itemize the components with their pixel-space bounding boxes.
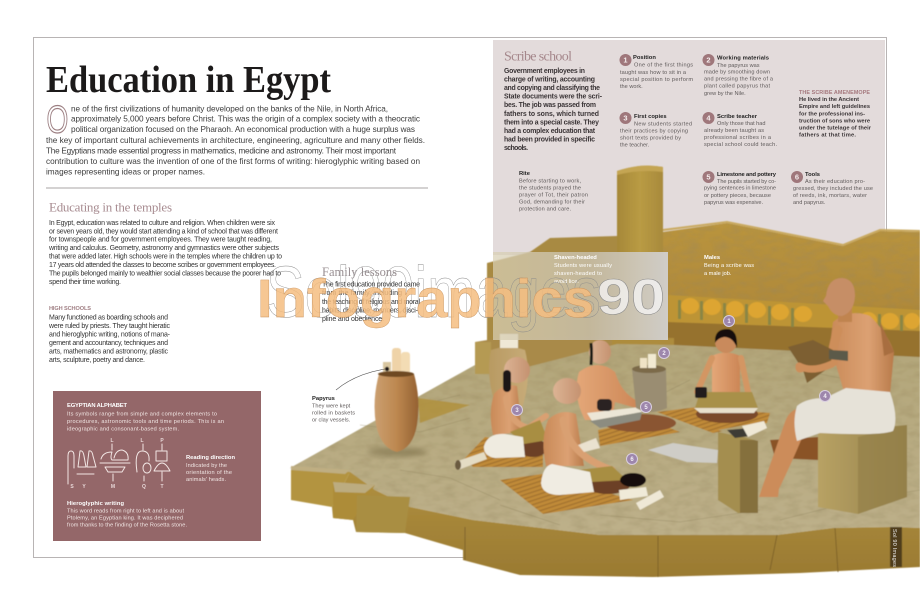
floor blocks <box>291 466 902 567</box>
watermark: Infographics <box>257 269 594 329</box>
hieroglyph chart: L <box>110 438 114 444</box>
reading direction note: Reading direction <box>186 455 235 461</box>
hieroglyphic writing note: This word reads from right to left and is about <box>67 508 184 514</box>
callout: 1 position: the work. <box>620 84 643 90</box>
callout: the scribe amenemope: THE SCRIBE AMENEMOPE <box>799 90 870 96</box>
text block: high schools: arts, sculpture, poetry and dance. <box>49 357 145 364</box>
heading: educating in the temples: Educating in the temples <box>49 200 172 214</box>
basket with rolls <box>632 354 667 412</box>
callout: 1 position: 1 <box>623 56 628 65</box>
callout: 5 limestone and pottery <box>702 171 777 206</box>
intro paragraph: the key of important cultural achievements in architecture, engineering, agriculture and many other fields. <box>46 136 425 145</box>
callout: shaven-headed: Students were usually <box>554 263 612 269</box>
callout: 4 scribe teacher: already been taught as <box>704 128 764 134</box>
alphabet heading and intro: Its symbols range from simple and complex elements to <box>67 412 217 418</box>
student 6: front <box>541 378 664 510</box>
scene number markers: 6 <box>630 457 634 463</box>
callout: rite: protection and care. <box>519 206 571 212</box>
hieroglyphic writing note <box>67 501 187 528</box>
panel: egyptian alphabet <box>53 391 261 541</box>
callout: the scribe amenemope: He lived in the Ancient <box>799 97 859 103</box>
scene number markers: 4 <box>823 394 827 400</box>
hieroglyph chart: Y <box>82 484 86 490</box>
callout: 2 working materials: made by smoothing down <box>704 70 770 76</box>
callout: rite: Rite <box>519 171 531 177</box>
hieroglyph chart <box>68 438 170 490</box>
alphabet heading and intro <box>67 403 224 432</box>
text block: temples: writing and calculus. Geometry, astronomy and gymnastics were other subjects <box>48 245 280 252</box>
image credit: Sol 90 Images <box>891 529 897 567</box>
callout: the scribe amenemope: fathers at that time. <box>799 132 856 138</box>
hieroglyphic writing note: from thanks to the finding of the Rosetta stone. <box>67 522 187 528</box>
intro paragraph: contribution to culture was the invention of one of the first forms of writing: hieroglyphic writing based on <box>46 157 420 166</box>
illustration: scribe classroom scene <box>290 166 920 577</box>
callout: 5 limestone and pottery: Limestone and pottery <box>717 172 777 178</box>
watermark: Sol90images <box>266 253 601 333</box>
callout: 6 tools: gressed, they included the use <box>793 186 873 192</box>
callout: 6 tools: 6 <box>795 173 799 182</box>
callout: papyrus <box>312 396 355 424</box>
back wall <box>475 222 920 376</box>
heading: family lessons: Family lessons <box>322 265 397 279</box>
callout: 4 scribe teacher: Only those that had <box>717 121 766 127</box>
callout: 6 tools <box>791 171 873 206</box>
mats <box>465 407 770 514</box>
leader line: papyrus <box>336 369 385 390</box>
callout: 4 scribe teacher: professional scribes in a <box>704 135 772 141</box>
callout: 3 first copies <box>620 112 692 148</box>
reading direction note: orientation of the <box>186 470 232 476</box>
callout: papyrus: rolled in baskets <box>312 410 355 416</box>
scene number markers: 1 <box>727 319 731 325</box>
back jar with rolls <box>475 334 528 408</box>
text block: family lessons: habits, discipline, manners, disci- <box>322 308 419 314</box>
callout: 4 scribe teacher: special school could teach. <box>704 142 777 148</box>
callout: papyrus: Papyrus <box>312 396 335 402</box>
front edge stone seams <box>465 527 838 577</box>
decorative frieze <box>668 295 920 331</box>
callout: the scribe amenemope: for the professional ins- <box>799 112 865 118</box>
callout: shaven-headed: avoid lice. <box>554 279 579 285</box>
intro paragraph: ne of the first civilizations of humanity developed on the banks of the Nile, in North Africa, <box>71 104 388 114</box>
text block: high schools: arts, mathematics and astronomy, plastic <box>49 348 168 356</box>
floor front edge <box>332 472 920 577</box>
heading: scribe school: Scribe school <box>504 50 572 64</box>
text block: temples: 17 years old attended the classes to become scribes or government employees. <box>49 262 276 269</box>
callout: 1 position <box>620 54 693 90</box>
callout: the scribe amenemope: truction of sons who were <box>799 118 870 124</box>
text block: high schools: gement and accountancy, techniques and <box>49 340 168 347</box>
callout: 1 position: special position to perform <box>620 77 693 83</box>
callout: 5 limestone and pottery: pying sentences in limestone <box>704 186 776 192</box>
callout: 5 limestone and pottery: 5 <box>706 173 711 182</box>
text block: high schools: HIGH SCHOOLS <box>49 306 91 312</box>
teacher seat block <box>818 425 907 514</box>
reading direction note: Indicated by the <box>186 463 227 469</box>
alphabet heading and intro: ideographic and consonant-based system. <box>67 426 179 432</box>
text block: scribe school <box>504 68 603 152</box>
hieroglyph chart: L <box>140 438 144 444</box>
callout: 1 position: One of the first things <box>634 62 693 68</box>
callout: 5 limestone and pottery: The pupils started by co- <box>717 179 776 185</box>
clay vessel with papyrus rolls <box>367 348 427 457</box>
callout: 2 working materials: 2 <box>706 56 711 65</box>
callout: rite: Before starting to work, <box>519 178 581 184</box>
callout: 2 working materials: grew by the Nile. <box>704 91 746 97</box>
callout: 1 position: taught was how to sit in a <box>620 70 687 76</box>
student 3: left <box>455 357 548 470</box>
callout: rite <box>519 171 588 212</box>
callout: males: Males <box>704 255 720 261</box>
text block: high schools: were ruled by priests. They taught hieratic <box>48 323 170 330</box>
callout: papyrus: or clay vessels. <box>312 418 351 424</box>
hieroglyph chart: T <box>160 484 164 490</box>
drop cap: O <box>46 98 68 142</box>
hieroglyph chart: S <box>70 484 74 490</box>
stool behind teacher <box>770 437 818 460</box>
callout: 3 first copies: the teacher. <box>620 142 650 148</box>
text block: family lessons: pline and obedience. <box>322 316 384 323</box>
hieroglyphic writing note: Ptolemy, an Egyptian king. It was deciphered <box>67 516 183 522</box>
intro paragraph: images representing ideas or proper names. <box>46 168 205 176</box>
teacher <box>759 278 895 497</box>
callout: the scribe amenemope: Empire and left guidelines <box>799 104 870 110</box>
section divider <box>46 188 428 189</box>
text block: family lessons <box>322 282 420 323</box>
scene number markers: 2 <box>662 351 666 357</box>
scene number markers: 5 <box>644 405 648 411</box>
callout: 5 limestone and pottery: or pottery pieces, because <box>704 193 771 199</box>
text block: scribe school: them into a special caste. They <box>504 120 599 126</box>
callout: 1 position: Position <box>633 55 656 61</box>
watermark: 90 <box>597 269 665 325</box>
callout: 4 scribe teacher: 4 <box>706 114 711 123</box>
hieroglyph chart: P <box>160 438 164 444</box>
text block: scribe school: schools. <box>504 145 528 152</box>
callout: 3 first copies: short texts provided by <box>620 136 681 142</box>
callout: shaven-headed: shaven-headed to <box>554 271 602 277</box>
alphabet heading and intro: procedures, astronomic tools and time periods. This is an <box>67 419 224 425</box>
floor cracks <box>360 370 920 525</box>
callout: 6 tools: As their education pro- <box>805 179 865 185</box>
callout: males: a male job. <box>704 271 732 277</box>
callout: shaven-headed: Shaven-headed <box>554 255 597 261</box>
text block: temples: or seven years old, they would start attending a kind of school that was different <box>49 228 278 236</box>
text block: scribe school: Government employees in <box>504 68 585 75</box>
hieroglyph chart: M <box>111 484 115 490</box>
text block: temples: for townspeople and for government employees. They were taught reading, <box>49 236 272 244</box>
callout: 3 first copies: 3 <box>623 114 628 123</box>
floor <box>290 344 920 535</box>
intro paragraph: political organization focused on the Pharaoh. An economical production with a huge surplus was <box>71 125 415 134</box>
callout: 4 scribe teacher: Scribe teacher <box>717 114 758 120</box>
text block: family lessons: from the family, including <box>322 290 402 297</box>
callout: 2 working materials <box>702 54 774 97</box>
callout: the scribe amenemope: under the tutelage of their <box>799 126 872 132</box>
text block: scribe school: charge of writing, accounting <box>504 76 595 84</box>
text block: temples: spend their time working. <box>49 279 121 286</box>
scene number markers <box>512 316 830 464</box>
text block: family lessons: the teaching of religious and moral <box>322 299 420 306</box>
student 1: child at the back <box>694 329 758 423</box>
callout: 2 working materials: plant called papyrus that <box>704 84 770 90</box>
callout: 4 scribe teacher <box>702 112 777 148</box>
translucent caption panel over wall <box>493 252 668 340</box>
callout: males <box>704 255 754 277</box>
callout: the scribe amenemope <box>799 90 872 138</box>
callout: 6 tools: and papyrus. <box>793 200 826 206</box>
title: Education in Egypt <box>46 59 331 101</box>
callout: rite: prayer of Tot, their patron <box>519 192 588 198</box>
text block: high schools: Many functioned as boarding schools and <box>49 314 168 322</box>
callout: 2 working materials: Working materials <box>717 56 769 62</box>
hieroglyphic writing note: Hieroglyphic writing <box>67 501 124 507</box>
column <box>612 166 674 347</box>
callout: 3 first copies: New students started <box>634 122 692 128</box>
reading direction note <box>186 455 235 483</box>
intro paragraph: The Egyptians made essential progress in mathematics, medicine and astronomy. Their most important <box>46 146 397 156</box>
reading direction note: animals' heads. <box>186 477 226 483</box>
small stone block with tools <box>718 421 767 513</box>
text block: temples <box>48 220 282 286</box>
callout: 2 working materials: The papyrus was <box>717 63 760 69</box>
callout: 2 working materials: and pressing the fibre of a <box>704 76 774 82</box>
scene number markers: 3 <box>515 408 519 414</box>
callout: papyrus: They were kept <box>312 404 351 410</box>
callout: rite: God, demanding for their <box>519 200 585 206</box>
floor tinted patch <box>418 398 470 423</box>
callout: 3 first copies: First copies <box>634 114 667 120</box>
callout: 6 tools: of reeds, ink, mortars, water <box>793 193 867 199</box>
text block: scribe school: and copying and classifying the <box>504 85 600 92</box>
callout: males: Being a scribe was <box>704 263 754 269</box>
student 2: back centre <box>577 340 676 432</box>
text block: scribe school: had been provided in specific <box>504 136 595 144</box>
hieroglyph chart: Q <box>142 484 146 490</box>
callout: 6 tools: Tools <box>805 172 820 178</box>
callout: 3 first copies: their practices by copying <box>620 128 688 134</box>
text block: temples: that were added later. High schools were in the temples where the children up to <box>49 254 282 260</box>
text block: scribe school: fathers to sons, which turned <box>504 111 599 118</box>
text block: scribe school: bes. The job was passed from <box>504 102 596 109</box>
text block: scribe school: had a complex education that <box>504 128 596 135</box>
intro paragraph <box>46 104 425 176</box>
text block: family lessons: The first education provided came <box>322 282 420 288</box>
text block: high schools: and hieroglyphic writing, notions of mana- <box>49 332 171 338</box>
text block: high schools <box>48 306 171 364</box>
white cloth <box>648 443 718 463</box>
callout: shaven-headed <box>554 255 612 285</box>
alphabet heading and intro: EGYPTIAN ALPHABET <box>67 403 127 409</box>
text block: scribe school: State documents were the scri- <box>504 94 603 100</box>
callout: rite: the students prayed the <box>519 186 581 192</box>
text block: temples: The pupils belonged mainly to wealthier social classes because the poorer had to <box>49 270 281 278</box>
panel: scribe school background <box>493 40 885 255</box>
callout: 5 limestone and pottery: papyrus was expensive. <box>704 200 763 206</box>
text block: temples: In Egypt, education was related to culture and religion. When children were six <box>49 220 276 227</box>
intro paragraph: approximately 5,000 years before Christ. This was the origin of a complex society with a theocratic <box>71 114 420 124</box>
